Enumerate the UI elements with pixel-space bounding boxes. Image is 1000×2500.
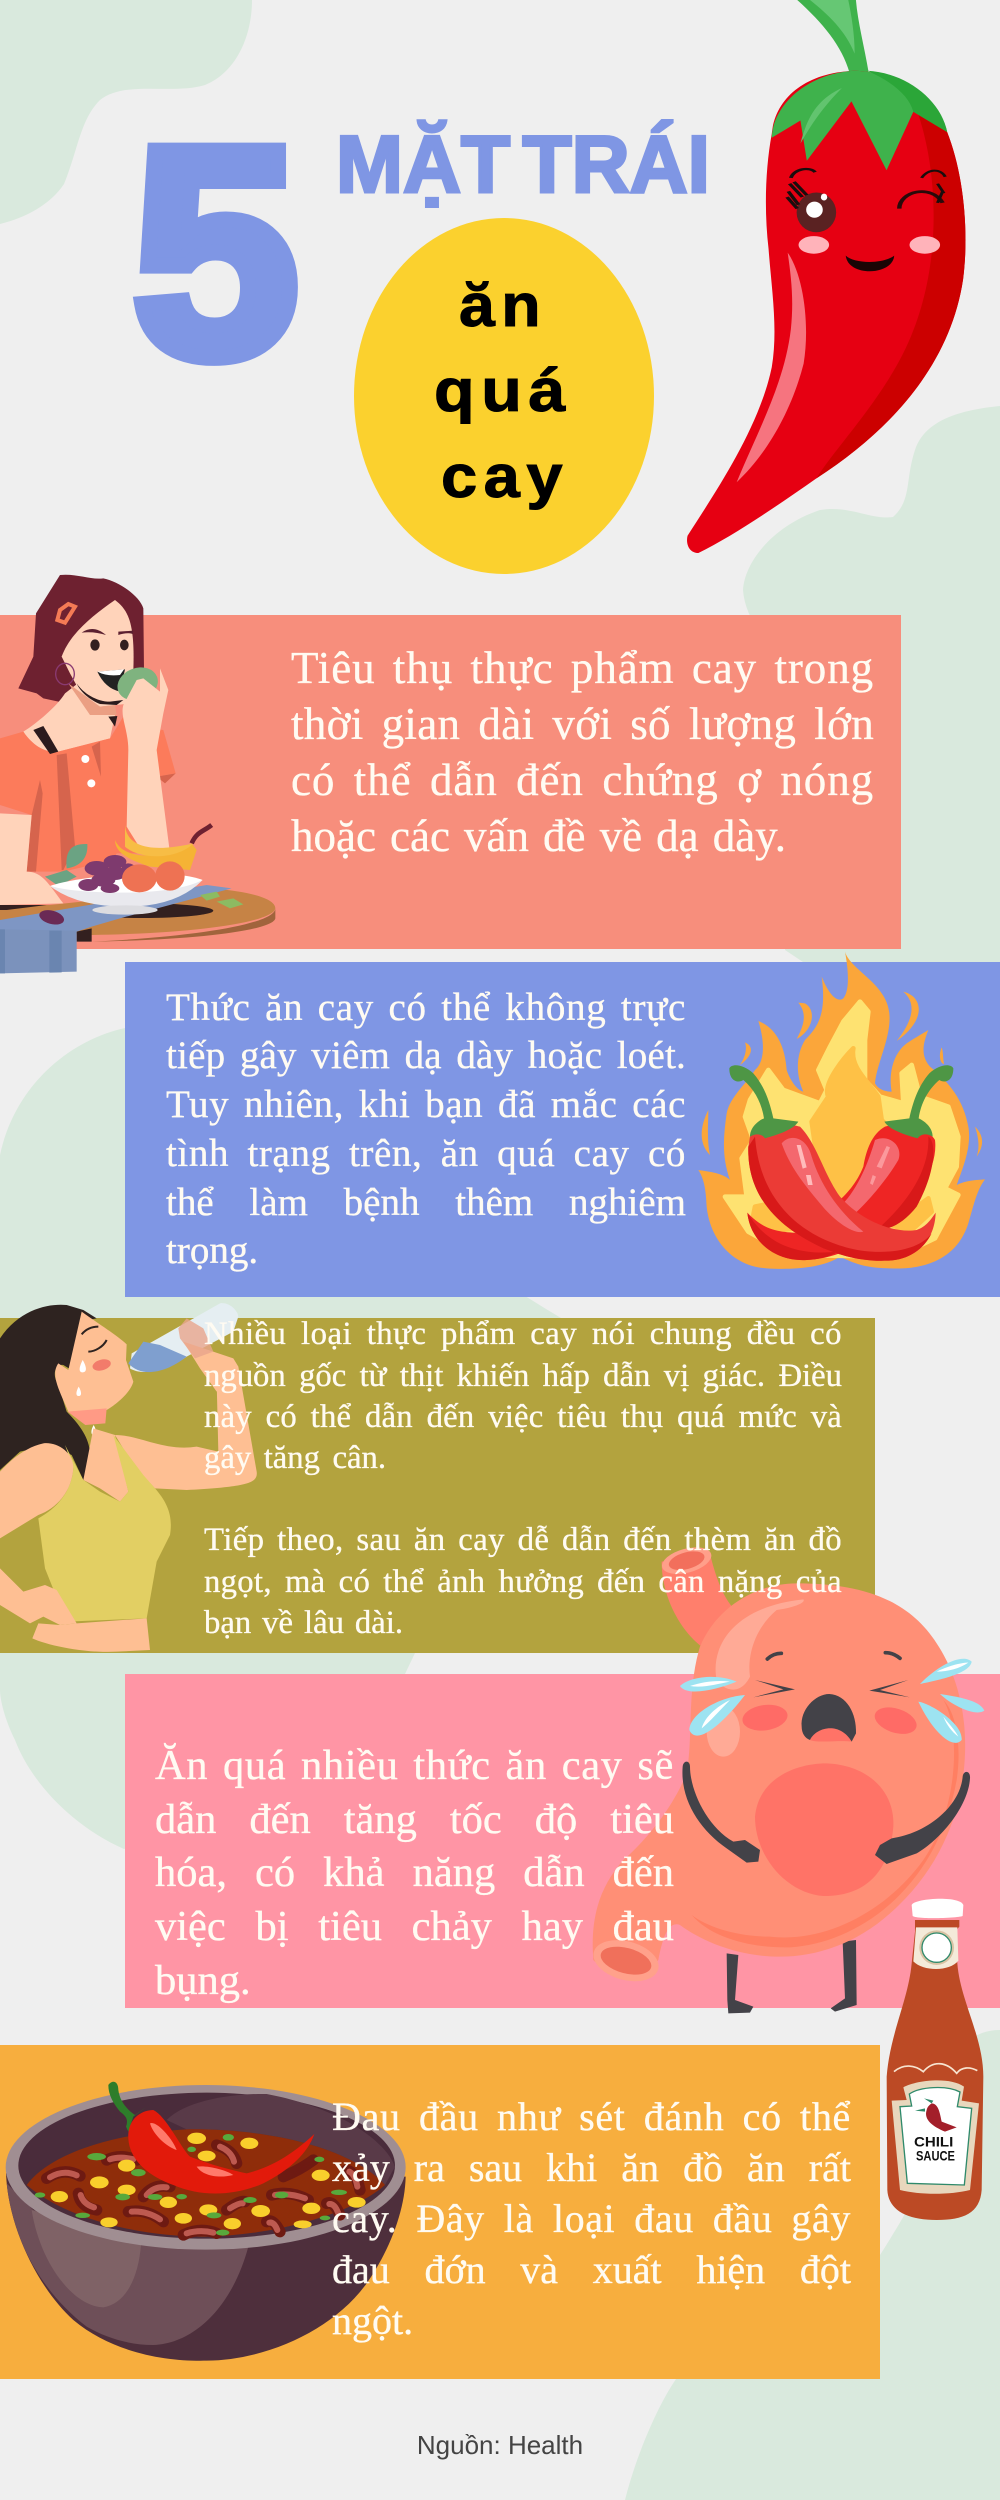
chili cheeks [799,236,829,254]
yellow oval with subtitle: ăn [459,272,547,339]
raised arm and hand [123,668,170,853]
face [55,1312,133,1412]
text block: panel 2: thể làm bệnh thêm nghiêm [166,1180,686,1224]
text block: panel 4: dẫn đến tăng tốc độ tiêu [155,1796,674,1843]
banana [115,840,197,870]
table runner [0,885,232,932]
illustration: woman eating fruit at table [0,575,275,973]
icon: smiling red chili [687,0,966,553]
tomatoes [155,861,185,891]
label text: CHILI [914,2134,953,2150]
text block: panel 2: tiếp gây viêm dạ dày hoặc loét. [166,1034,686,1077]
chili stems [729,1065,798,1138]
text block: panel 4: hóa, có khả năng dẫn đến [155,1849,674,1896]
tank top [38,1435,171,1622]
text block: panel 1: hoặc các vấn đề về dạ dày. [291,810,786,860]
hair [18,575,144,703]
background blob: middle left [0,1028,600,1849]
flame sparks [702,992,982,1157]
apple [113,662,163,706]
sweat drops [76,1360,96,1435]
tears [680,1659,984,1743]
text block: panel 3: Nhiều loại thực phẩm cay nói chung đều có [204,1316,842,1352]
belly [755,1763,893,1896]
text block: panel 5: cay. Đây là loại đau đầu gây [332,2196,851,2241]
lower tube opening [589,1933,663,1988]
straps [33,716,117,754]
text block: panel 3: gây tăng cân. [204,1440,386,1476]
flame outer [698,952,985,1269]
left chili [748,1125,936,1261]
flame yellow [725,1002,958,1257]
cheek [91,1357,112,1373]
title: MẶT TRÁI: MẶT TRÁI [336,120,710,210]
chili green cap [772,71,947,170]
chili stem [797,0,869,73]
cheeks [741,1702,789,1733]
label chilies [926,2103,957,2132]
leaf garnish [45,844,87,886]
grapes [78,855,135,893]
stomach body [593,1583,965,1975]
herbs [35,2134,347,2236]
source credit: Nguồn: Health [417,2430,583,2460]
right chili [747,1125,935,1260]
text block: panel 3: nguồn gốc từ thịt khiến hấp dẫn vị giác. Điều [204,1358,842,1394]
table top [92,908,275,942]
glass and water [130,1303,238,1372]
text block: panel 3 [204,1316,842,1641]
text block: panel 1: có thể dẫn đến chứng ợ nóng [291,755,874,805]
text block: panel 3: ngọt, mà có thể ảnh hưởng đến cân nặng của [204,1564,842,1600]
shirt buttons [81,755,89,763]
bottle body [887,1920,983,2220]
waist [32,1618,150,1652]
background blob: top left [0,0,252,224]
panel 1: salmon [0,615,901,949]
hair [0,1305,97,1480]
flame core [752,1048,932,1232]
face [62,600,134,707]
text block: panel 3: bạn về lâu dài. [204,1605,403,1641]
eye and brow [82,1327,107,1352]
text block: panel 4: việc bị tiêu chảy hay đau [155,1903,674,1950]
stomach highlights [716,1599,804,1690]
text block: panel 5: đau đớn và xuất hiện đột [332,2247,851,2292]
brows [767,1653,900,1659]
text block: panel 1: Tiêu thụ thực phẩm cay trong [291,643,874,693]
chest [83,1428,128,1502]
text block: panel 1 [291,643,874,861]
cap [912,1899,963,1918]
chili eye [797,192,836,232]
text block: panel 5: Đau đầu như sét đánh có thể [332,2094,851,2139]
chili on soup [108,2082,147,2132]
text block: panel 2: tình trạng trên, ăn quá cay có [166,1132,686,1175]
yellow oval with subtitle [354,218,654,574]
neck label [913,1927,958,1969]
background blob: bottom right [625,2030,1000,2500]
chili highlight [737,253,806,482]
yellow oval with subtitle: cay [441,443,569,510]
text block: panel 4: bụng. [155,1957,251,2004]
text block: panel 4 [154,1742,674,2004]
bowl rim [6,2085,406,2250]
left arm [0,1443,73,1538]
text block: panel 2: Thức ăn cay có thể không trực [166,986,686,1029]
bowl body [6,2173,406,2361]
panel 5: orange [0,2045,880,2379]
illustration: bowl of chili soup [6,2082,406,2361]
text block: panel 5: ngột. [332,2298,413,2343]
hand on waist [0,1568,77,1625]
soup [27,2129,385,2237]
illustration: woman drinking water [0,1303,257,1652]
panel 3: olive [0,1318,875,1653]
text block: panel 2: trọng. [166,1229,258,1272]
legs [727,1940,857,2013]
text block: panel 3: này có thể dẫn đến việc tiêu thụ quá mức và [204,1399,842,1435]
text block: panel 5 [332,2094,851,2343]
beans [47,2145,360,2235]
lower arm [0,813,63,905]
sauce wave line [894,2064,977,2073]
illustration: crying stomach [589,1543,984,2013]
chili smile [846,256,894,271]
title: big number 5: 5 [133,86,298,418]
text block: panel 1: thời gian dài với số lượng lớn [291,699,874,749]
fruit plate [50,880,203,907]
hair clip and earring [57,604,75,623]
raised arm and shoulder [115,1365,257,1490]
squeezed eyes [753,1680,910,1697]
illustration: two chilies in flames [698,952,985,1269]
shirt [0,717,176,872]
illustration: chili sauce bottle: SAUCE [916,2148,955,2164]
loose plum and leaves [38,908,66,927]
text block: panel 3: Tiếp theo, sau ăn cay dễ dẫn đến thèm ăn đồ [204,1522,842,1558]
yellow oval with subtitle: quá [434,357,572,424]
neck and chest [23,682,115,752]
mouth [97,669,125,692]
text block: panel 2: Tuy nhiên, khi bạn đã mắc các [166,1083,686,1126]
brows and eyes [82,629,133,635]
panel 2: blue [125,962,1000,1297]
corn [51,2133,366,2229]
chili body [687,71,966,553]
illustration: chili sauce bottle [887,1899,983,2220]
text block: panel 2 [166,986,686,1272]
main label [892,2080,979,2194]
panel 4: pink [125,1674,1000,2008]
arms [682,1762,970,1864]
text block: panel 5: xảy ra sau khi ăn đồ ăn rất [332,2145,851,2190]
text block: panel 4: Ăn quá nhiều thức ăn cay sẽ [155,1742,674,1789]
background blob: upper right [743,406,1000,962]
chili winking eye [899,192,943,209]
mouth [802,1694,856,1742]
esophagus [662,1557,733,1647]
